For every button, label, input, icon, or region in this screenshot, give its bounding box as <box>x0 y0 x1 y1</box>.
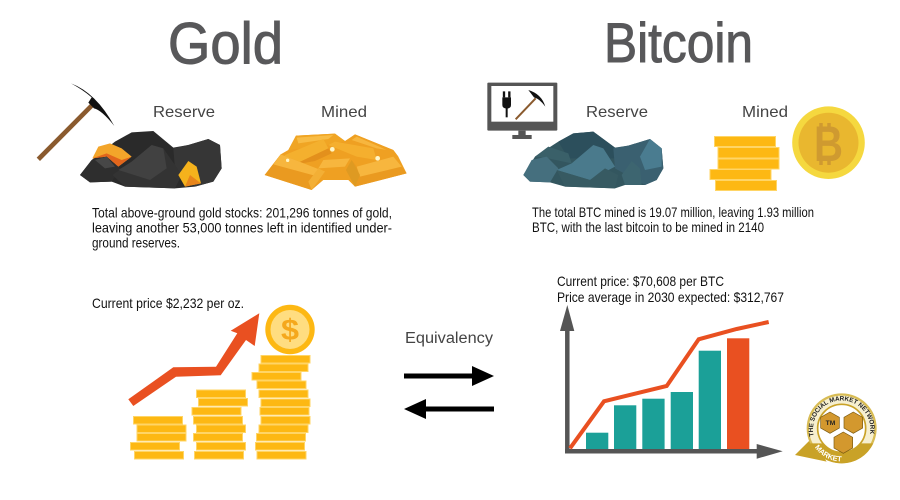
chart: gold coin stacks <box>130 356 310 459</box>
label: bitcoin mined: Mined <box>742 104 788 121</box>
chart: bitcoin price bars <box>560 305 783 459</box>
text: gold stocks description: ground reserves. <box>92 234 180 250</box>
icon: teal ore rocks <box>523 132 663 188</box>
logo: social market network badge: MARKET <box>815 444 842 462</box>
text: bitcoin price <box>557 273 784 305</box>
text: BTC mined description: BTC, with the last bitcoin to be mined in 2140 <box>532 219 764 235</box>
icon: bitcoin coin stack <box>710 136 779 190</box>
icon: pickaxe <box>38 83 114 159</box>
text: gold current price: Current price $2,232 per oz. <box>92 295 244 311</box>
logo: social market network badge: THE SOCIAL MARKET NETWORK <box>808 396 875 437</box>
arrow: right <box>404 366 494 386</box>
label: equivalency: Equivalency <box>405 330 493 347</box>
icon: dollar coin <box>265 305 315 354</box>
icon: bitcoin coin <box>792 106 865 179</box>
logo: social market network badge <box>795 393 877 464</box>
arrow: gold price rising <box>128 313 259 406</box>
label: gold reserve: Reserve <box>153 104 215 121</box>
text: gold stocks description <box>92 204 392 250</box>
title: Gold: Gold <box>168 12 283 76</box>
text: BTC mined description <box>532 204 814 235</box>
text: gold stocks description: Total above-ground gold stocks: 201,296 tonnes of gold, <box>92 204 392 220</box>
title: Bitcoin: Bitcoin <box>604 11 753 74</box>
arrow: left <box>404 399 494 419</box>
logo: social market network badge: TM <box>826 420 836 427</box>
text: bitcoin price: Current price: $70,608 per BTC <box>557 273 724 289</box>
icon: gold ore rocks <box>80 131 222 188</box>
icon: gold bars <box>265 134 407 190</box>
text: bitcoin price: Price average in 2030 expected: $312,767 <box>557 289 784 305</box>
label: gold mined: Mined <box>321 104 367 121</box>
text: gold stocks description: leaving another 53,000 tonnes left in identified under- <box>92 220 392 236</box>
icon: bitcoin coin: B <box>814 116 843 172</box>
icon: monitor with plug and pickaxe <box>487 83 557 139</box>
icon: dollar coin: $ <box>281 314 299 347</box>
label: bitcoin reserve: Reserve <box>586 104 648 121</box>
text: BTC mined description: The total BTC mined is 19.07 million, leaving 1.93 million <box>532 204 814 220</box>
